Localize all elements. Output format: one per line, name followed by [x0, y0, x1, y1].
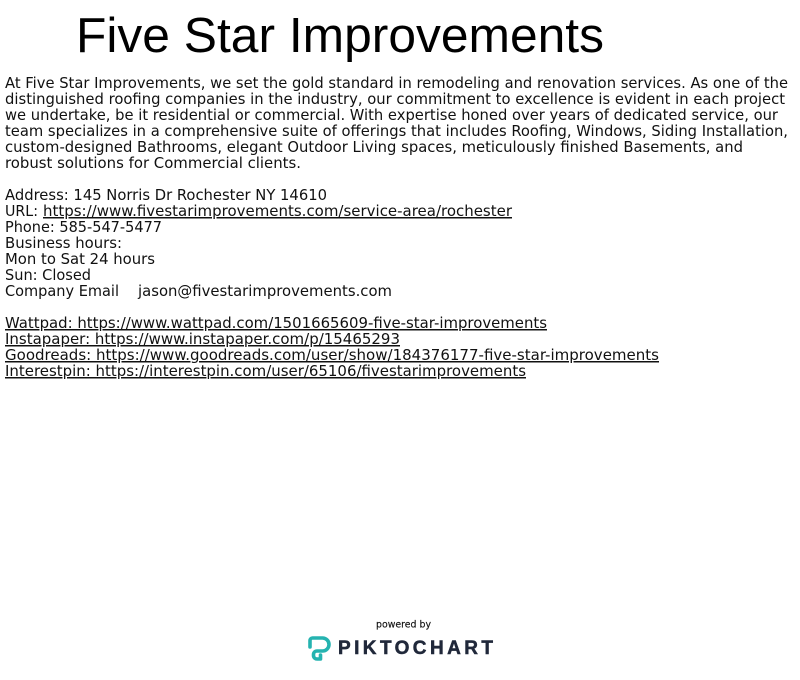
text block: company description: team specializes in a comprehensive suite of offerings that includes Roofing, Windows, Siding Installation,	[5, 122, 788, 140]
powered by label: powered by	[376, 620, 431, 630]
text block: company description: distinguished roofing companies in the industry, our commitment to excellence is evident in each project	[5, 90, 785, 108]
footer: powered by Piktochart	[310, 620, 493, 659]
text block: profile links: Wattpad: https://www.wattpad.com/1501665609-five-star-improvements	[5, 314, 547, 332]
text block: company description: we undertake, be it residential or commercial. With expertise honed over years of dedicated service, our	[5, 106, 779, 124]
text block: contact details: Phone: 585-547-5477	[5, 218, 162, 236]
text block: profile links: Interestpin: https://interestpin.com/user/65106/fivestarimprovements	[5, 362, 526, 380]
text block: contact details	[5, 186, 513, 300]
text block: contact details: Mon to Sat 24 hours	[5, 250, 155, 268]
text block: company description: robust solutions for Commercial clients.	[5, 154, 301, 172]
wordmark: PIKTOCHART	[338, 638, 493, 659]
text block: contact details: https://www.fivestarimprovements.com/service-area/rochester	[43, 202, 513, 220]
text block: profile links: Instapaper: https://www.instapaper.com/p/15465293	[5, 330, 400, 348]
text block: company description: custom-designed Bathrooms, elegant Outdoor Living spaces, meticulously finished Basements, and	[5, 138, 743, 156]
text block: profile links	[5, 314, 659, 380]
text block: contact details: jason@fivestarimprovements.com	[137, 282, 392, 300]
title: Five Star Improvements	[76, 9, 604, 63]
text block: contact details: Sun: Closed	[5, 266, 91, 284]
icon: Piktochart logo	[310, 638, 329, 659]
text block: contact details: Company Email	[5, 282, 119, 300]
text block: company description: At Five Star Improvements, we set the gold standard in remodeling and renovation services. As one of the	[5, 74, 788, 92]
text block: contact details: Address: 145 Norris Dr Rochester NY 14610	[5, 186, 327, 204]
text block: contact details: Business hours:	[5, 234, 122, 252]
text block: contact details: URL:	[5, 202, 38, 220]
text block: company description	[5, 74, 788, 172]
text block: profile links: Goodreads: https://www.goodreads.com/user/show/184376177-five-star-improvements	[5, 346, 659, 364]
